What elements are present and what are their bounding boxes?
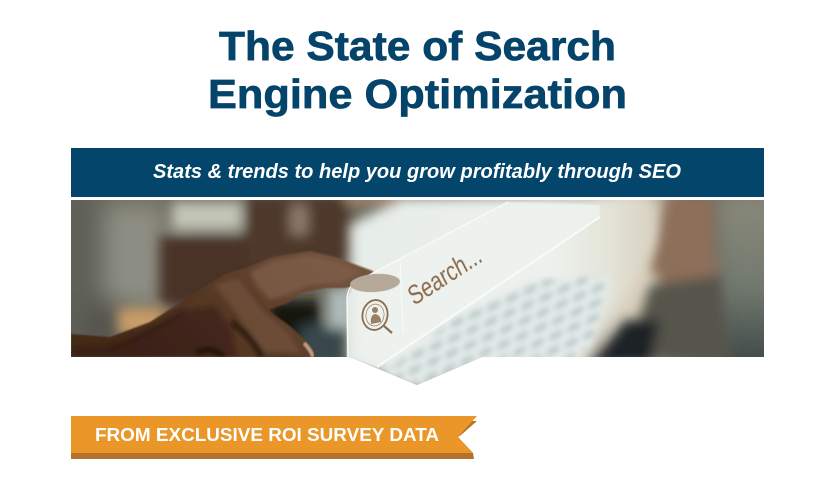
subtitle text: Stats & trends to help you grow profitably through SEO xyxy=(153,160,681,183)
icon: search magnifier with person xyxy=(360,298,392,333)
search bar panel xyxy=(347,202,600,367)
infographic header xyxy=(71,30,764,459)
search bar outline xyxy=(347,202,508,357)
search text: Search... xyxy=(403,238,486,311)
keyboard xyxy=(385,276,612,385)
title: The State of Search xyxy=(219,23,616,69)
ribbon text: FROM EXCLUSIVE ROI SURVEY DATA xyxy=(95,425,439,445)
ribbon label xyxy=(71,416,477,459)
subtitle banner xyxy=(71,148,764,197)
title xyxy=(208,23,627,117)
hero photo: finger touching a search bar xyxy=(71,200,764,385)
hand shading xyxy=(71,255,360,357)
glass area above the keyboard xyxy=(350,195,655,388)
hand xyxy=(71,251,378,357)
title: Engine Optimization xyxy=(208,71,627,117)
fingernail reflection xyxy=(350,274,400,292)
